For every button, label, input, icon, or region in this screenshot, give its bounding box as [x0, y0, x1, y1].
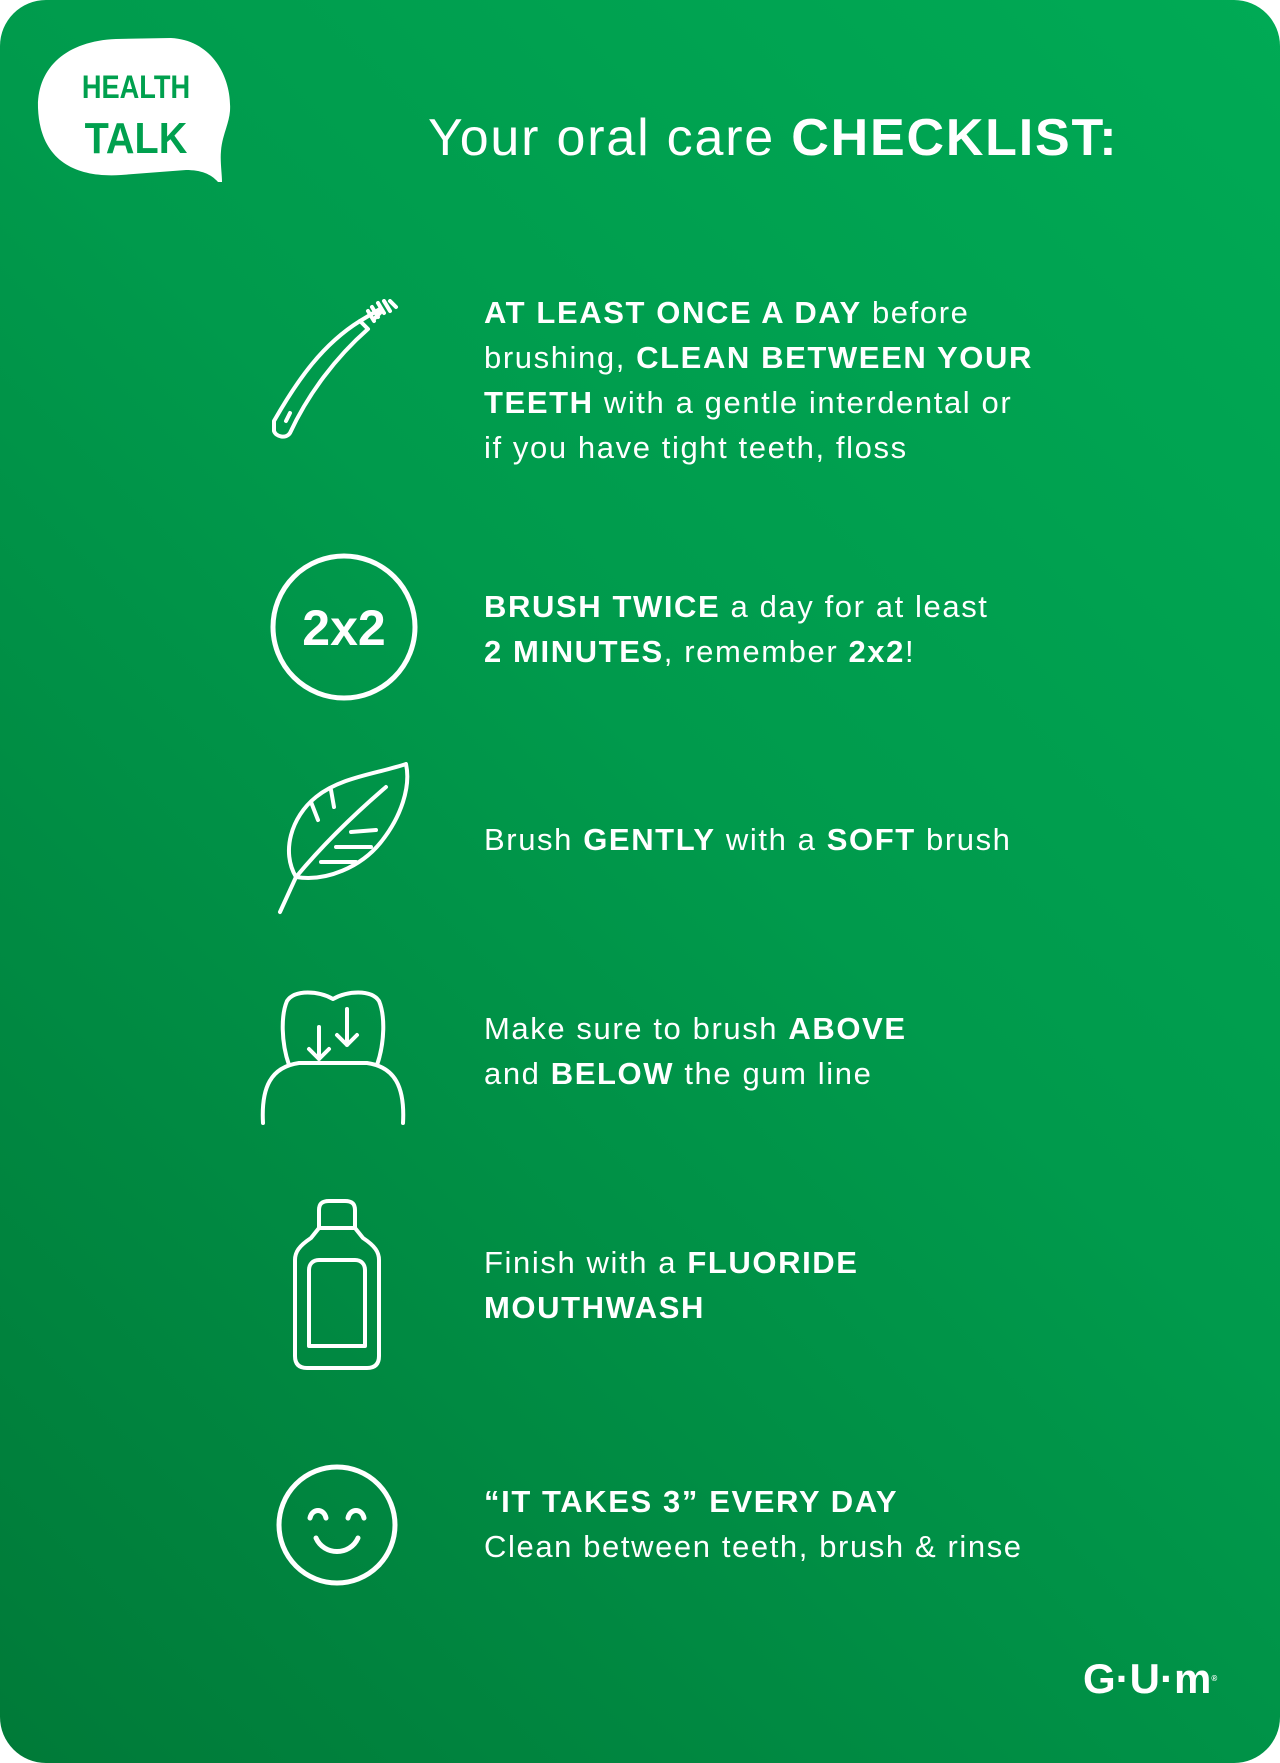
- icon: 2x2 circle: [270, 554, 418, 700]
- logo: health talk speech bubble: [38, 38, 230, 182]
- text: item 6: “IT TAKES 3” EVERY DAY: [484, 1484, 898, 1519]
- text: item 2: [484, 589, 989, 669]
- text: item 5: Finish with a FLUORIDE: [484, 1245, 859, 1280]
- icon: interdental brush: [272, 299, 398, 439]
- text: item 2: 2 MINUTES, remember 2x2!: [484, 634, 915, 669]
- logo: health talk speech bubble: HEALTH: [82, 70, 190, 106]
- icon: mouthwash bottle: [293, 1199, 381, 1370]
- text: item 3: Brush GENTLY with a SOFT brush: [484, 822, 1012, 857]
- text: item 2: BRUSH TWICE a day for at least: [484, 589, 989, 624]
- text: item 1: [484, 295, 1033, 465]
- text: item 4: and BELOW the gum line: [484, 1056, 872, 1091]
- logo: GUM: G·U·m®: [1083, 1655, 1217, 1702]
- text: item 1: TEETH with a gentle interdental or: [484, 385, 1012, 420]
- title: Your oral care CHECKLIST:: [428, 109, 1118, 167]
- icon: tooth with arrows: [260, 990, 406, 1125]
- text: item 5: MOUTHWASH: [484, 1290, 705, 1325]
- icon: feather: [278, 762, 410, 914]
- text: item 1: AT LEAST ONCE A DAY before: [484, 295, 969, 330]
- icon: smiley: [276, 1464, 398, 1586]
- text: item 6: [484, 1484, 1023, 1564]
- text: item 1: if you have tight teeth, floss: [484, 430, 908, 465]
- text: item 4: Make sure to brush ABOVE: [484, 1011, 907, 1046]
- text: item 4: [484, 1011, 907, 1091]
- text: item 6: Clean between teeth, brush & rinse: [484, 1529, 1023, 1564]
- text: item 1: brushing, CLEAN BETWEEN YOUR: [484, 340, 1033, 375]
- text: item 5: [484, 1245, 859, 1325]
- logo: health talk speech bubble: TALK: [85, 113, 187, 162]
- icon: 2x2 circle: 2x2: [302, 600, 386, 656]
